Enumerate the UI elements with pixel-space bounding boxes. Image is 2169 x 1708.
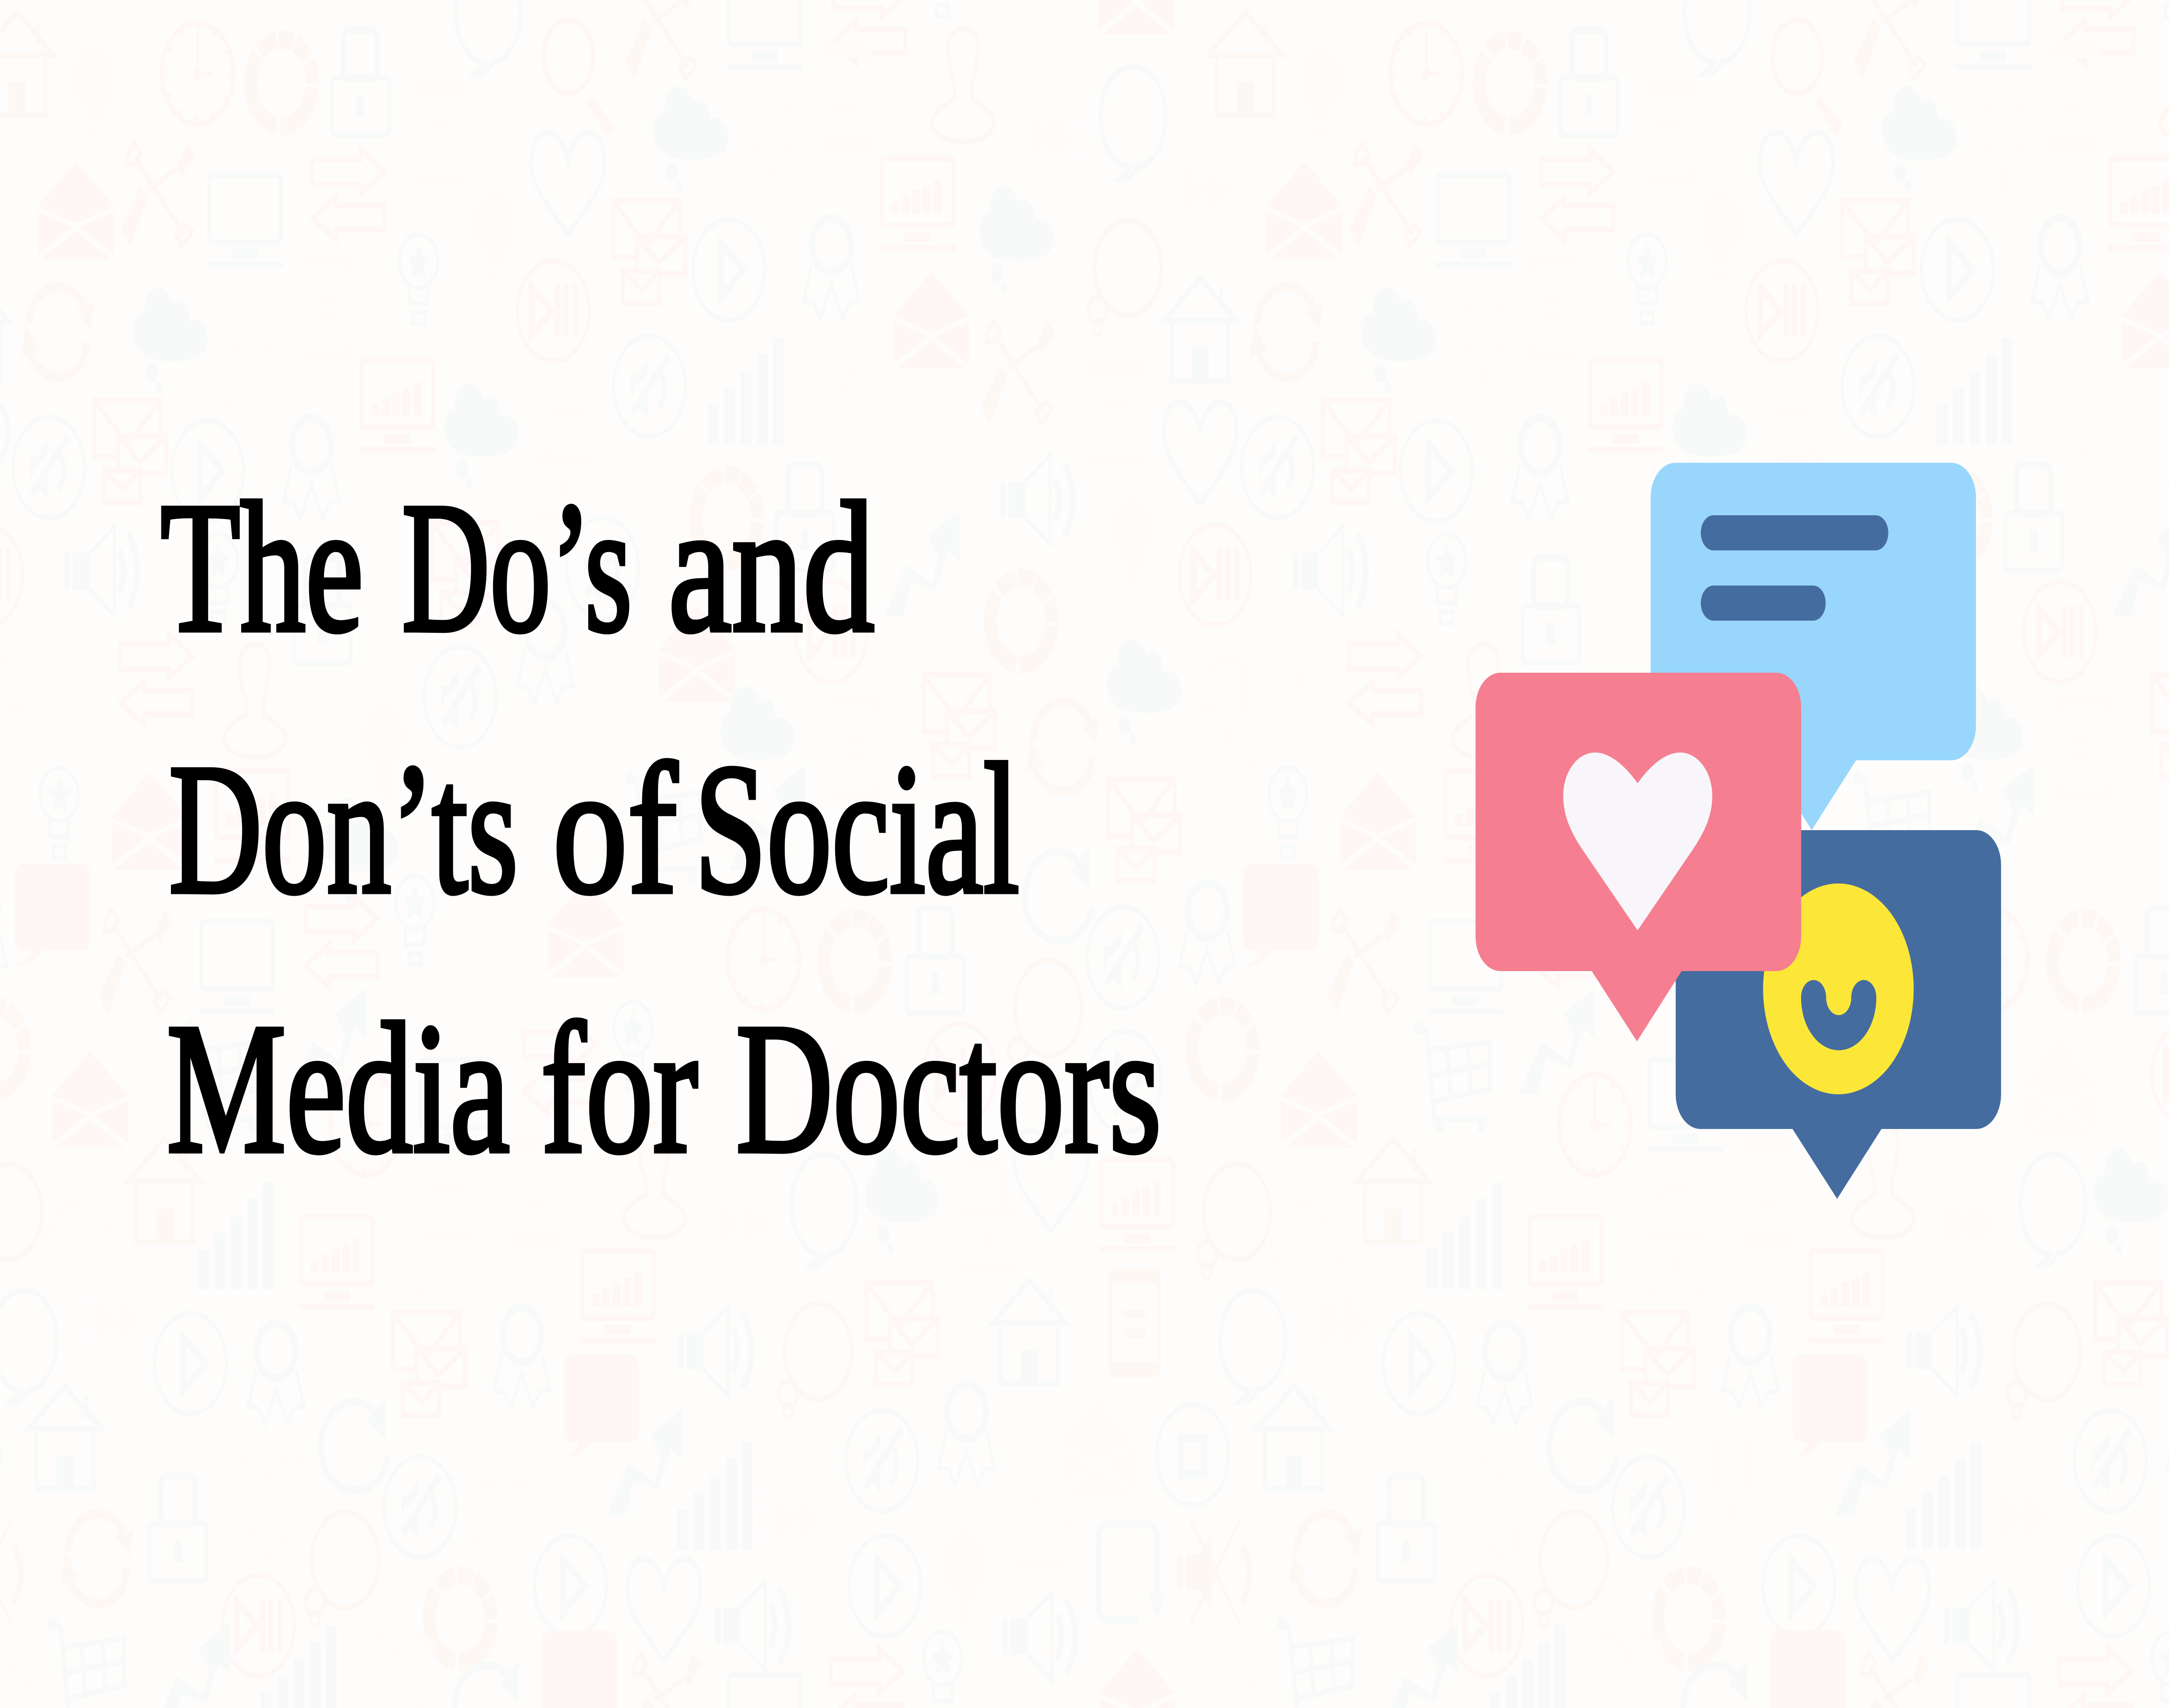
icon: pink heart bubble	[1475, 673, 1801, 1041]
title line 1: The	[161, 464, 364, 671]
title line 3	[167, 985, 1161, 1191]
icon: chat bubbles illustration	[1475, 463, 2001, 1199]
icon: navy smiley bubble	[1676, 830, 2001, 1199]
icon: blue message bubble	[1651, 463, 1976, 830]
title	[161, 464, 1161, 1191]
title line 1: and	[668, 464, 875, 671]
title line 2: Social	[695, 726, 1019, 932]
title line 2: Don’ts	[169, 726, 518, 932]
title line 1	[161, 464, 875, 671]
title line 1: Do’s	[402, 464, 632, 671]
title line 2	[169, 726, 1019, 932]
title line 3: for	[541, 985, 698, 1191]
title line 2: of	[553, 726, 679, 932]
title line 3: Doctors	[736, 985, 1161, 1191]
title line 3: Media	[167, 985, 510, 1191]
